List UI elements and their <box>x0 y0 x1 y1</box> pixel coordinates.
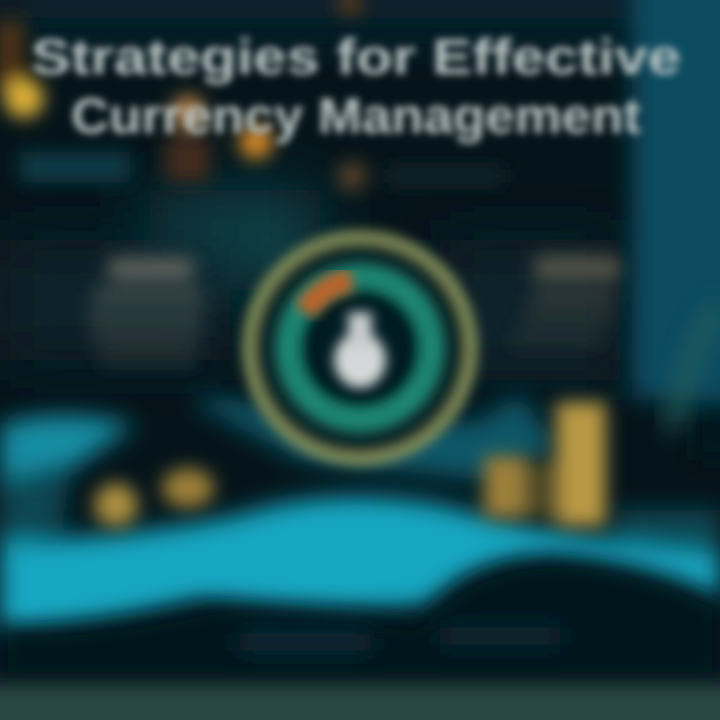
icon: dollar sign <box>334 312 386 388</box>
panel: teal right curtain <box>632 0 720 460</box>
text block: right <box>510 256 620 345</box>
open book <box>0 560 720 680</box>
wave: cyan water <box>0 395 720 630</box>
decorative lights top left <box>0 0 505 191</box>
gauge orange segment <box>305 280 352 312</box>
title: Currency Management <box>71 88 641 144</box>
gauge green ring <box>288 276 432 420</box>
icon: coins left <box>94 468 214 527</box>
background: teal glows <box>0 0 720 380</box>
title: Strategies for Effective <box>31 29 681 85</box>
title <box>31 29 681 144</box>
gauge outer ring <box>248 236 472 460</box>
right accent stroke <box>672 305 718 430</box>
chart: donut gauge <box>248 236 472 460</box>
text block: left <box>88 258 204 364</box>
chart: coin stacks right <box>484 402 606 526</box>
footer band <box>0 684 720 720</box>
